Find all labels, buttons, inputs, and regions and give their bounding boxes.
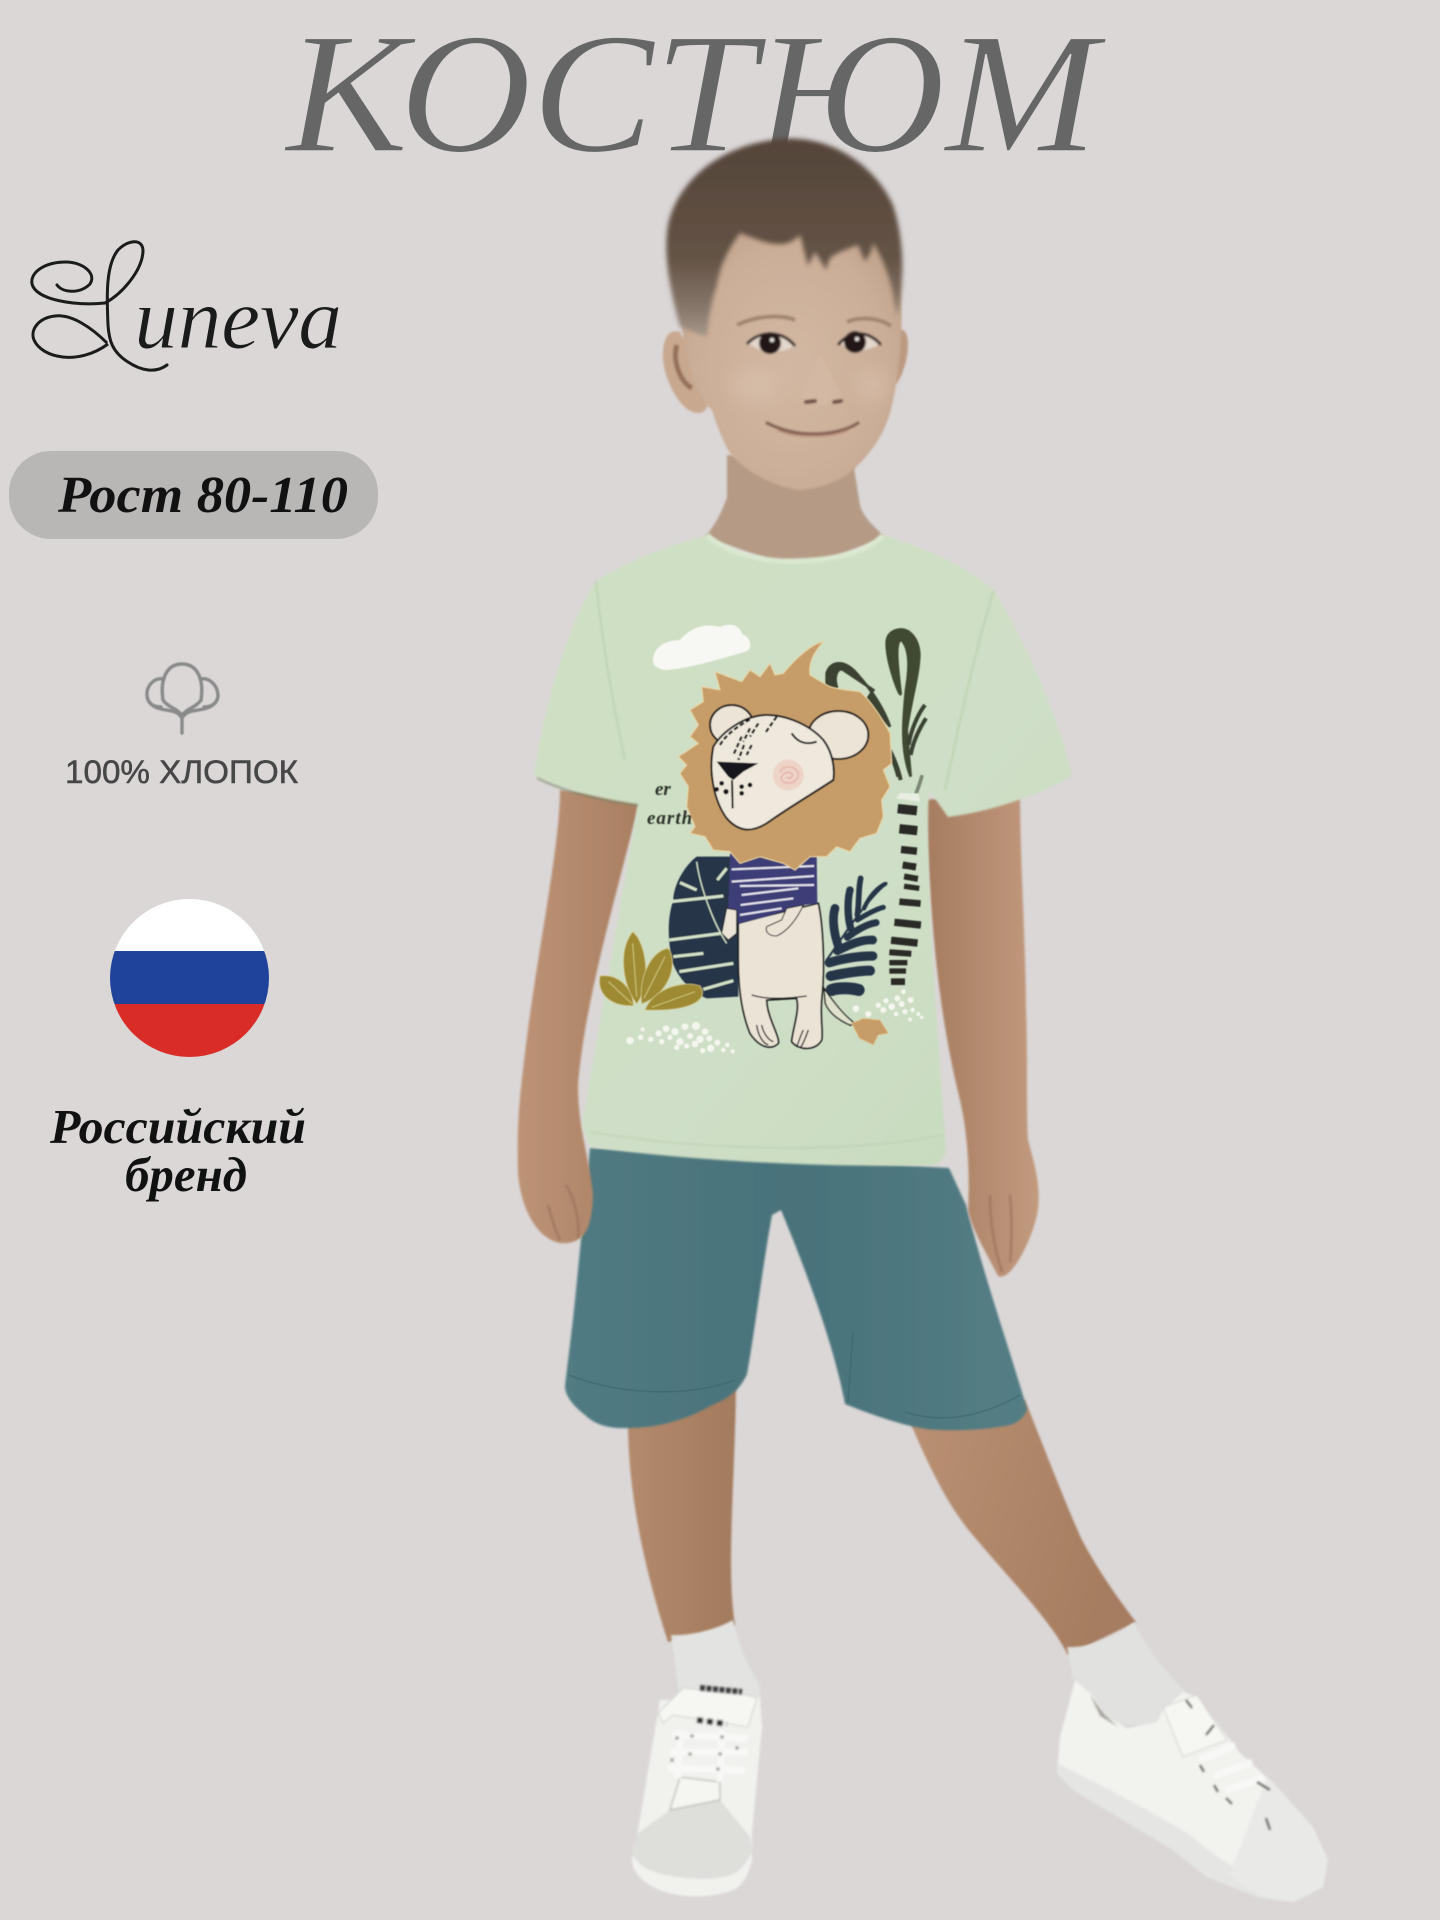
left shoe [632,1688,762,1896]
lion head [711,715,834,830]
white ground dots [626,989,923,1053]
left sock [671,1620,760,1700]
lion cheek [773,760,804,790]
olive plant [599,932,703,1010]
brand caption [49,1099,306,1202]
head [663,138,908,490]
shirt print: lion and jungle [599,625,926,1053]
material label: 100% ХЛОПОК [65,754,298,790]
trunk top stripes [897,804,918,870]
left tongue [670,1777,720,1810]
left ear [663,331,709,413]
lion ears [808,711,868,759]
left laces [668,1730,748,1782]
hair [666,138,902,337]
right leg [905,1400,1136,1655]
neck [705,455,885,570]
boy figure [518,138,1328,1902]
shirt slogan: earth [647,808,693,829]
brand caption: бренд [125,1147,247,1202]
lion left arm [722,908,737,940]
monstera leaf [669,857,738,998]
right sock [1067,1622,1186,1725]
right toe cap [1230,1778,1328,1902]
t-shirt [534,535,1072,1166]
face [680,215,902,490]
brand caption: Российский [49,1099,306,1154]
height label: Рост 80-110 [57,467,348,524]
sleeve seams [596,581,994,790]
left leg [628,1385,736,1642]
left toe cap [632,1800,752,1879]
cheeks highlight [731,367,888,403]
fern leaf [827,878,887,990]
upper print layer [678,629,926,870]
logo: Luneva [32,242,342,370]
right laces [1200,1745,1264,1790]
right hand fingers [990,1195,1012,1272]
eyes [747,331,881,354]
height pill [9,451,378,539]
right strap [1163,1695,1227,1757]
palm leaves [827,629,926,802]
left strap [658,1688,757,1727]
lion right arm [766,905,803,936]
shorts seams [569,1332,1020,1418]
icon: russian flag [110,899,269,1057]
trunk stripes [889,861,921,985]
lion face marks [714,717,817,808]
right ear [893,330,908,388]
icon: cotton boll [147,664,218,733]
title: КОСТЮМ [283,0,1107,189]
lower print layer [599,853,923,1053]
eyebrows [737,317,891,326]
right arm [925,790,1039,1277]
nose [802,355,841,405]
striped lion shirt [722,853,817,940]
left arm [518,790,640,1243]
shorts [565,1148,1027,1430]
lion mane [678,642,892,870]
right shoe [1057,1680,1328,1902]
lion tail tuft [852,1018,888,1045]
shirt slogan [647,779,693,829]
left hand fingers [548,1185,578,1240]
mouth [767,423,858,434]
shirt slogan: er [655,779,671,800]
cloud [653,625,750,670]
right sole band [1057,1763,1312,1902]
lion tail [824,988,854,1025]
lion body [738,903,823,1048]
